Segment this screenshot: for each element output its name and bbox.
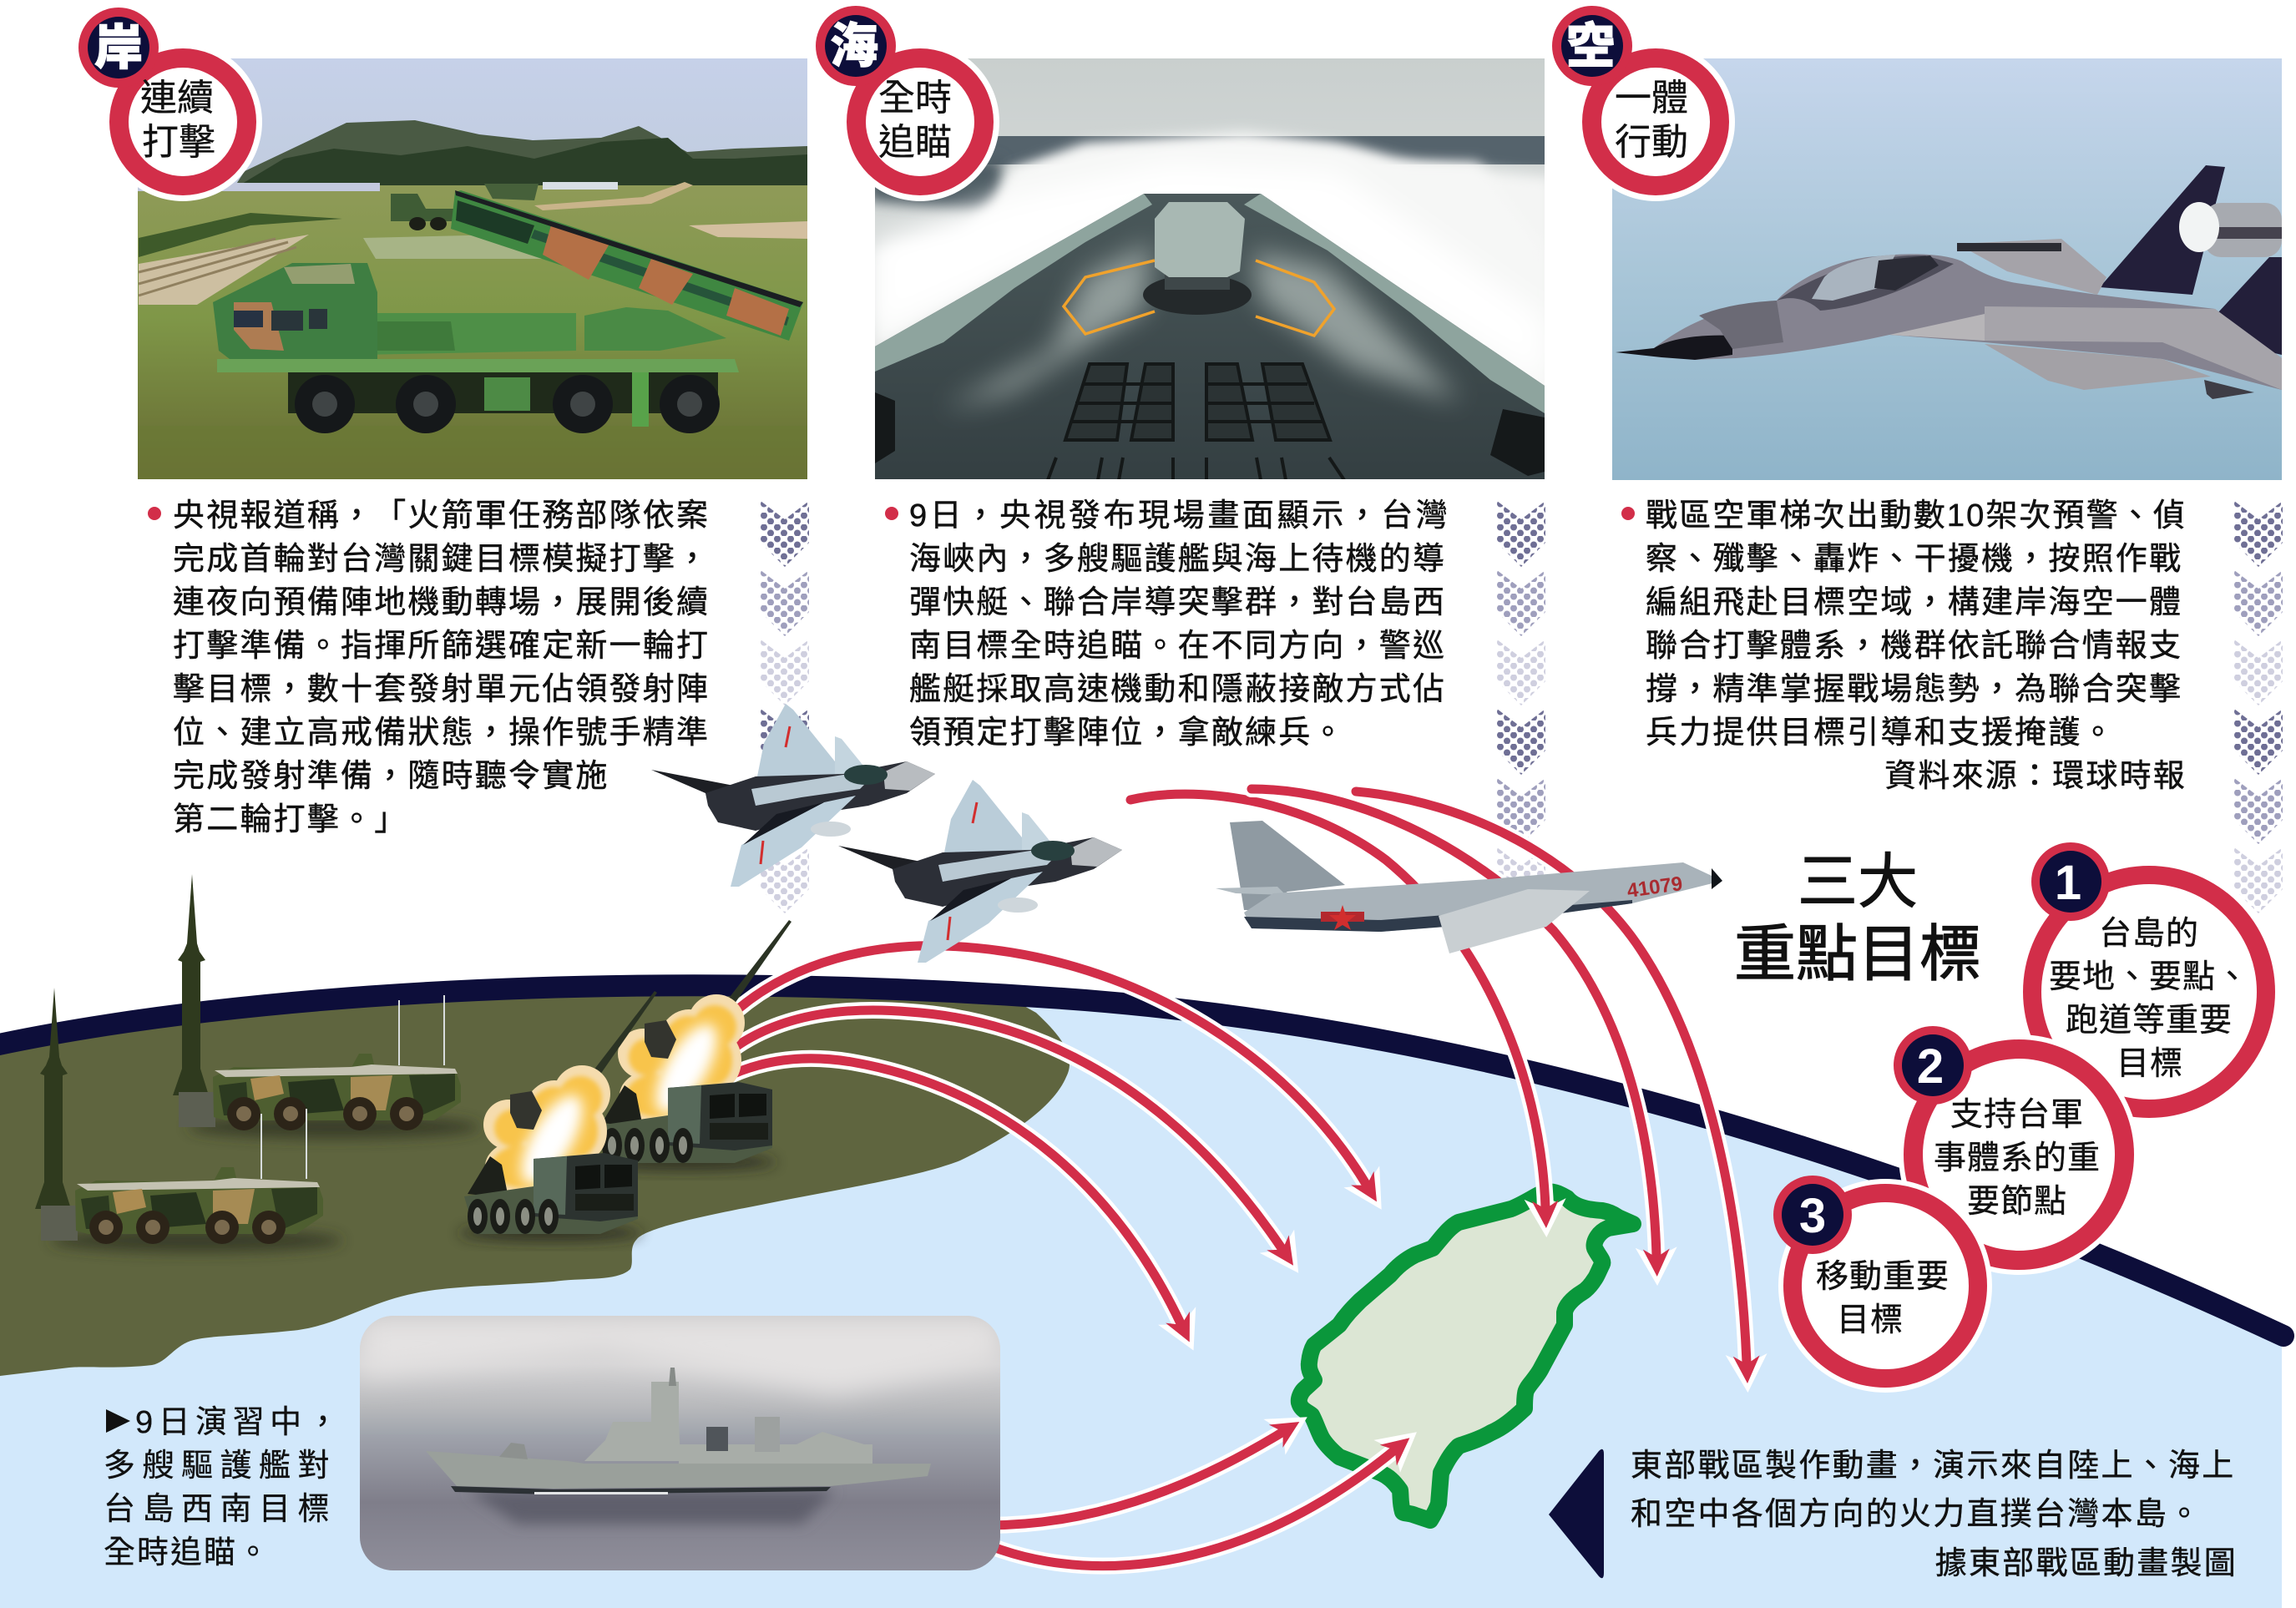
text block: shore: 第二輪打擊。」 (173, 802, 407, 837)
destroyer (426, 1451, 931, 1489)
sea category circle: 海 (830, 19, 878, 73)
dotted chevron column 3 (2234, 501, 2283, 913)
radar pod (2204, 203, 2282, 257)
rear rocket truck firing (593, 920, 791, 1171)
bottom note: 和空中各個方向的火力直撲台灣本島。 (1631, 1497, 2202, 1532)
text block: sea: 艦艇採取高速機動和隱蔽接敵方式佔 (909, 672, 1446, 707)
target circle 1: 1 (2055, 856, 2081, 910)
arrow: land arc 2 (726, 1010, 1282, 1248)
background truck (391, 194, 455, 221)
map: Taiwan island (1299, 1192, 1633, 1520)
shore label ring: 連續 (140, 78, 214, 119)
illustration: missile launchers on shore (35, 874, 791, 1252)
gun turret (1143, 275, 1252, 315)
target circle 2 (1894, 1026, 2139, 1275)
fighter jet 1 (651, 704, 935, 887)
badge: shore (78, 8, 262, 201)
sea spray on deck (943, 242, 1152, 409)
text block: sea (885, 498, 1449, 751)
sea label ring: 全時 (878, 78, 952, 119)
air category circle: 空 (1566, 19, 1615, 73)
ship caption: 9日演習中， (135, 1405, 344, 1440)
target circle 2: 事體系的重 (1934, 1140, 2101, 1176)
target circle 3: 移動重要 (1816, 1259, 1950, 1295)
launcher support (584, 307, 726, 351)
heading: three major targets: 三大 (1798, 849, 1918, 916)
text block: air: 撐，精準掌握戰場態勢，為聯合突擊 (1646, 672, 2182, 707)
ship caption (104, 1405, 344, 1570)
target circle 1: 跑道等重要 (2066, 1003, 2233, 1039)
shore label ring (104, 43, 262, 201)
front launcher vehicle (35, 988, 342, 1252)
rear tail fin (2100, 165, 2225, 295)
text block: shore: 連夜向預備陣地機動轉場，展開後續 (173, 585, 710, 620)
orange deck markings (1064, 260, 1155, 334)
heading: three major targets: 重點目標 (1734, 919, 1981, 989)
arrows: toward Taiwan (960, 789, 1747, 1566)
target circle 1: 台島的 (2099, 916, 2199, 952)
launcher tubes (451, 190, 803, 341)
target circle 2: 要節點 (1967, 1184, 2067, 1220)
H-6 bomber (1216, 821, 1722, 953)
arrow: sea bottom A (960, 1433, 1282, 1525)
air category circle (1552, 6, 1632, 86)
arrows: from land (723, 946, 1366, 1323)
arrow: land arc 1 (734, 946, 1366, 1184)
panel: sea photo warship bow (868, 58, 1553, 480)
dirt road and fields (534, 182, 693, 210)
target circle 2: 2 (1917, 1039, 1944, 1094)
text block: sea: 南目標全時追瞄。在不同方向，警巡 (909, 629, 1446, 664)
text block: air (1621, 498, 2187, 794)
text block: shore: 完成首輪對台灣關鍵目標模擬打擊， (173, 542, 710, 577)
arrow: air arc b (1252, 789, 1656, 1256)
text block: shore: 完成發射準備，隨時聽令實施 (173, 759, 609, 794)
panel: air photo fighter jet (1612, 58, 2282, 480)
target circle 2: 支持台軍 (1950, 1097, 2084, 1133)
bottom note: 據東部戰區動畫製圖 (1935, 1546, 2238, 1581)
distant sea (987, 136, 1545, 164)
truck body (359, 313, 576, 355)
badge: sea (816, 6, 999, 201)
navy triangle pointer (1549, 1449, 1604, 1578)
text block: air: 編組飛赴目標空域，構建岸海空一體 (1646, 585, 2182, 620)
text block: sea: 海峽內，多艘驅護艦與海上待機的導 (909, 542, 1446, 577)
text block: shore: 位、建立高戒備狀態，操作號手精準 (173, 716, 710, 751)
arrow: air arc c (1356, 791, 1747, 1363)
arrow: sea bottom B (960, 1451, 1393, 1566)
panel: sea and land map (0, 983, 2283, 1608)
wheels (295, 375, 355, 433)
target circle 1: 目標 (2116, 1046, 2183, 1082)
text block: sea: 彈快艇、聯合岸導突擊群，對台島西 (909, 585, 1446, 620)
coastline band (0, 985, 2283, 1336)
target circle 3 (1773, 1176, 1992, 1393)
front rocket truck firing (458, 991, 657, 1241)
land: mainland coast (0, 983, 1070, 1376)
panel: shore photo rocket launcher (138, 58, 807, 479)
panel: ship photo (360, 1316, 1000, 1570)
reflection (468, 1490, 835, 1524)
ship caption: 台島西南目標 (104, 1492, 336, 1527)
red star marking (1321, 912, 1364, 922)
text block: air: 聯合打擊體系，機群依託聯合情報支 (1646, 629, 2182, 664)
ship caption: 多艘驅護艦對 (104, 1449, 336, 1484)
text block: shore: 擊目標，數十套發射單元佔領發射陣 (173, 672, 710, 707)
heading: three major targets (1734, 849, 1981, 989)
arrow: land arc 3 (723, 1059, 1181, 1323)
air label ring: 一體 (1615, 78, 1688, 119)
ocean (0, 985, 2282, 1608)
text block: air: 資料來源：環球時報 (1884, 759, 2187, 794)
text block: shore (148, 498, 710, 837)
text block: shore: 打擊準備。指揮所篩選確定新一輪打 (173, 629, 710, 664)
bottom note: 東部戰區製作動畫，演示來自陸上、海上 (1631, 1449, 2236, 1484)
text block: air: 戰區空軍梯次出動數10架次預警、偵 (1646, 498, 2187, 533)
ship caption: 全時追瞄。 (104, 1535, 271, 1570)
shore category circle: 岸 (94, 21, 143, 75)
text block: sea: 9日，央視發布現場畫面顯示，台灣 (909, 498, 1449, 533)
badge: air (1552, 6, 1735, 201)
deck (875, 194, 1545, 480)
sea category circle (816, 6, 896, 86)
text block: shore: 央視報道稱，「火箭軍任務部隊依案 (173, 498, 710, 533)
target circle 1 (2018, 842, 2280, 1123)
target circle 1: 要地、要點、 (2049, 959, 2249, 995)
air label ring (1576, 43, 1735, 201)
tail and wing (1957, 239, 2106, 295)
wave spray (1012, 144, 1553, 409)
text block: air: 察、殲擊、轟炸、干擾機，按照作戰 (1646, 542, 2182, 577)
tail number: 41079 (1626, 872, 1684, 903)
hills (237, 120, 807, 183)
dotted chevron column 2 (1497, 501, 1545, 913)
rear launcher vehicle (173, 874, 480, 1139)
fighter jet 2 (838, 780, 1122, 963)
sea label ring: 追瞄 (878, 122, 952, 163)
dotted chevron column 1 (761, 501, 809, 913)
sea label ring (841, 43, 999, 201)
target circle 3: 目標 (1837, 1302, 1904, 1338)
text block: sea: 領預定打擊陣位，拿敵練兵。 (909, 716, 1346, 751)
shore category circle (78, 8, 159, 88)
target circle 3: 3 (1799, 1189, 1826, 1243)
text block: air: 兵力提供目標引導和支援掩護。 (1646, 716, 2116, 751)
arrow: air arc a (1130, 794, 1545, 1207)
bottom note (1631, 1449, 2238, 1581)
truck cab (213, 263, 377, 359)
air label ring: 行動 (1615, 122, 1688, 163)
missile launch cells (1048, 364, 1344, 480)
shore label ring: 打擊 (142, 122, 215, 163)
